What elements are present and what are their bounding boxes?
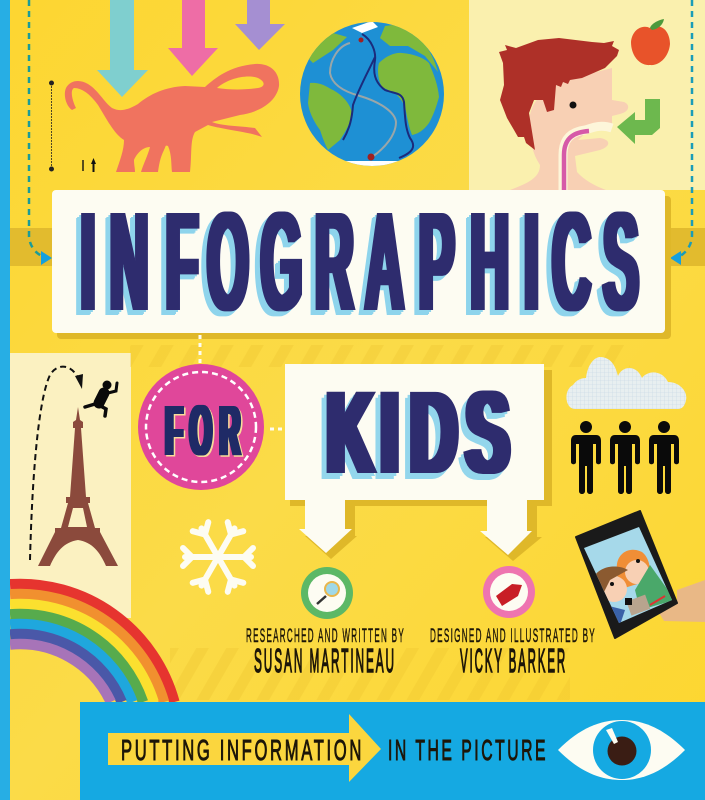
dashed arrow: right <box>670 0 692 265</box>
title text: INFOGRAPHICS <box>81 182 639 340</box>
person 3 <box>649 421 679 494</box>
panel: INFOGRAPHICS title <box>52 182 671 340</box>
panel: cream lower left <box>10 353 131 618</box>
arrow: pink <box>168 0 218 76</box>
head cross-section <box>499 38 628 190</box>
phone with photo <box>576 511 705 638</box>
icon: pencil <box>483 566 535 618</box>
dinosaur <box>65 64 279 172</box>
jumping figure <box>85 380 117 416</box>
person 2 <box>610 421 640 494</box>
tagline arrow <box>108 714 381 782</box>
people icons <box>571 421 679 494</box>
ruler scale <box>50 81 54 171</box>
cloud <box>566 357 686 409</box>
connector dashes <box>200 335 285 429</box>
arrow: teal <box>97 0 148 97</box>
tiny person scale <box>82 158 96 172</box>
dashed arrow: left <box>29 0 52 265</box>
KIDS text: KIDS <box>327 368 509 499</box>
text: SUSAN MARTINEAU <box>254 642 396 679</box>
credit: illustrator <box>430 626 596 679</box>
tagline text 1: PUTTING INFORMATION <box>121 735 364 767</box>
globe <box>299 21 445 167</box>
left blue spine <box>0 0 10 800</box>
rainbow <box>10 584 174 702</box>
diagonal stripes near credits <box>170 648 570 700</box>
arrow: purple <box>235 0 285 50</box>
eiffel tower <box>38 407 118 566</box>
bottom blue banner <box>80 702 705 800</box>
diagonal stripes near KIDS <box>130 345 630 367</box>
icon: magnifier <box>301 567 353 619</box>
gold band behind title <box>10 228 705 266</box>
badge: FOR <box>138 364 264 490</box>
icon: apple <box>631 19 670 65</box>
eye <box>570 102 576 108</box>
panel: KIDS <box>285 364 552 561</box>
hair <box>499 38 619 150</box>
icon: eye <box>558 720 685 780</box>
text: RESEARCHED AND WRITTEN BY <box>246 626 405 647</box>
dashed jump arc <box>30 367 83 560</box>
badge: FOR: FOR <box>165 392 240 471</box>
person 1 <box>571 421 601 494</box>
snowflake <box>183 522 253 592</box>
panel: cream top right <box>469 0 705 190</box>
hand <box>659 580 705 622</box>
arrow: green bent <box>617 99 660 144</box>
tagline text 2: IN THE PICTURE <box>388 735 548 767</box>
credit: author <box>246 626 405 679</box>
